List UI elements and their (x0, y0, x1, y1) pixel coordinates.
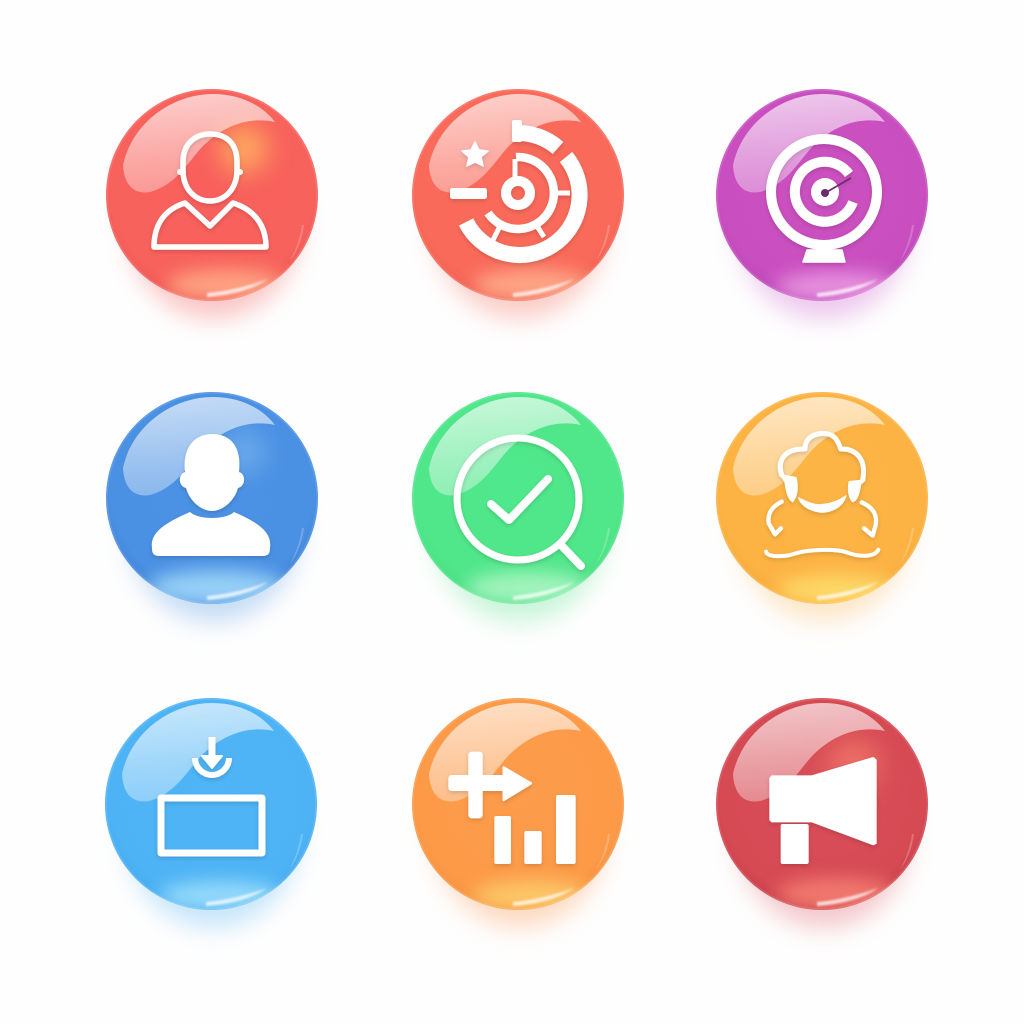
icon: radar dial with star and minus (450, 120, 580, 255)
button: download tray on sky blue (105, 698, 317, 928)
icon: download arrow over rectangle (161, 737, 262, 853)
button: curly-haired figure on amber (716, 392, 928, 622)
icon: solid person (152, 434, 270, 556)
icon: magnifier with check mark (457, 438, 581, 566)
button: solid person on blue (106, 392, 318, 622)
button: person outline on red (106, 89, 318, 319)
button: magnifier with check on green (412, 392, 624, 622)
button: arrow and bar chart on orange (412, 698, 624, 928)
icon: person outline (154, 134, 266, 247)
button: radar target on coral (412, 89, 624, 319)
button: megaphone on crimson (716, 698, 928, 928)
icon: curly-haired figure outline (766, 433, 878, 556)
button: target on stand on purple (716, 89, 928, 319)
icon: megaphone (770, 758, 876, 864)
icon: cross arrow with bars (448, 752, 576, 864)
icon: target on stand (771, 139, 877, 262)
